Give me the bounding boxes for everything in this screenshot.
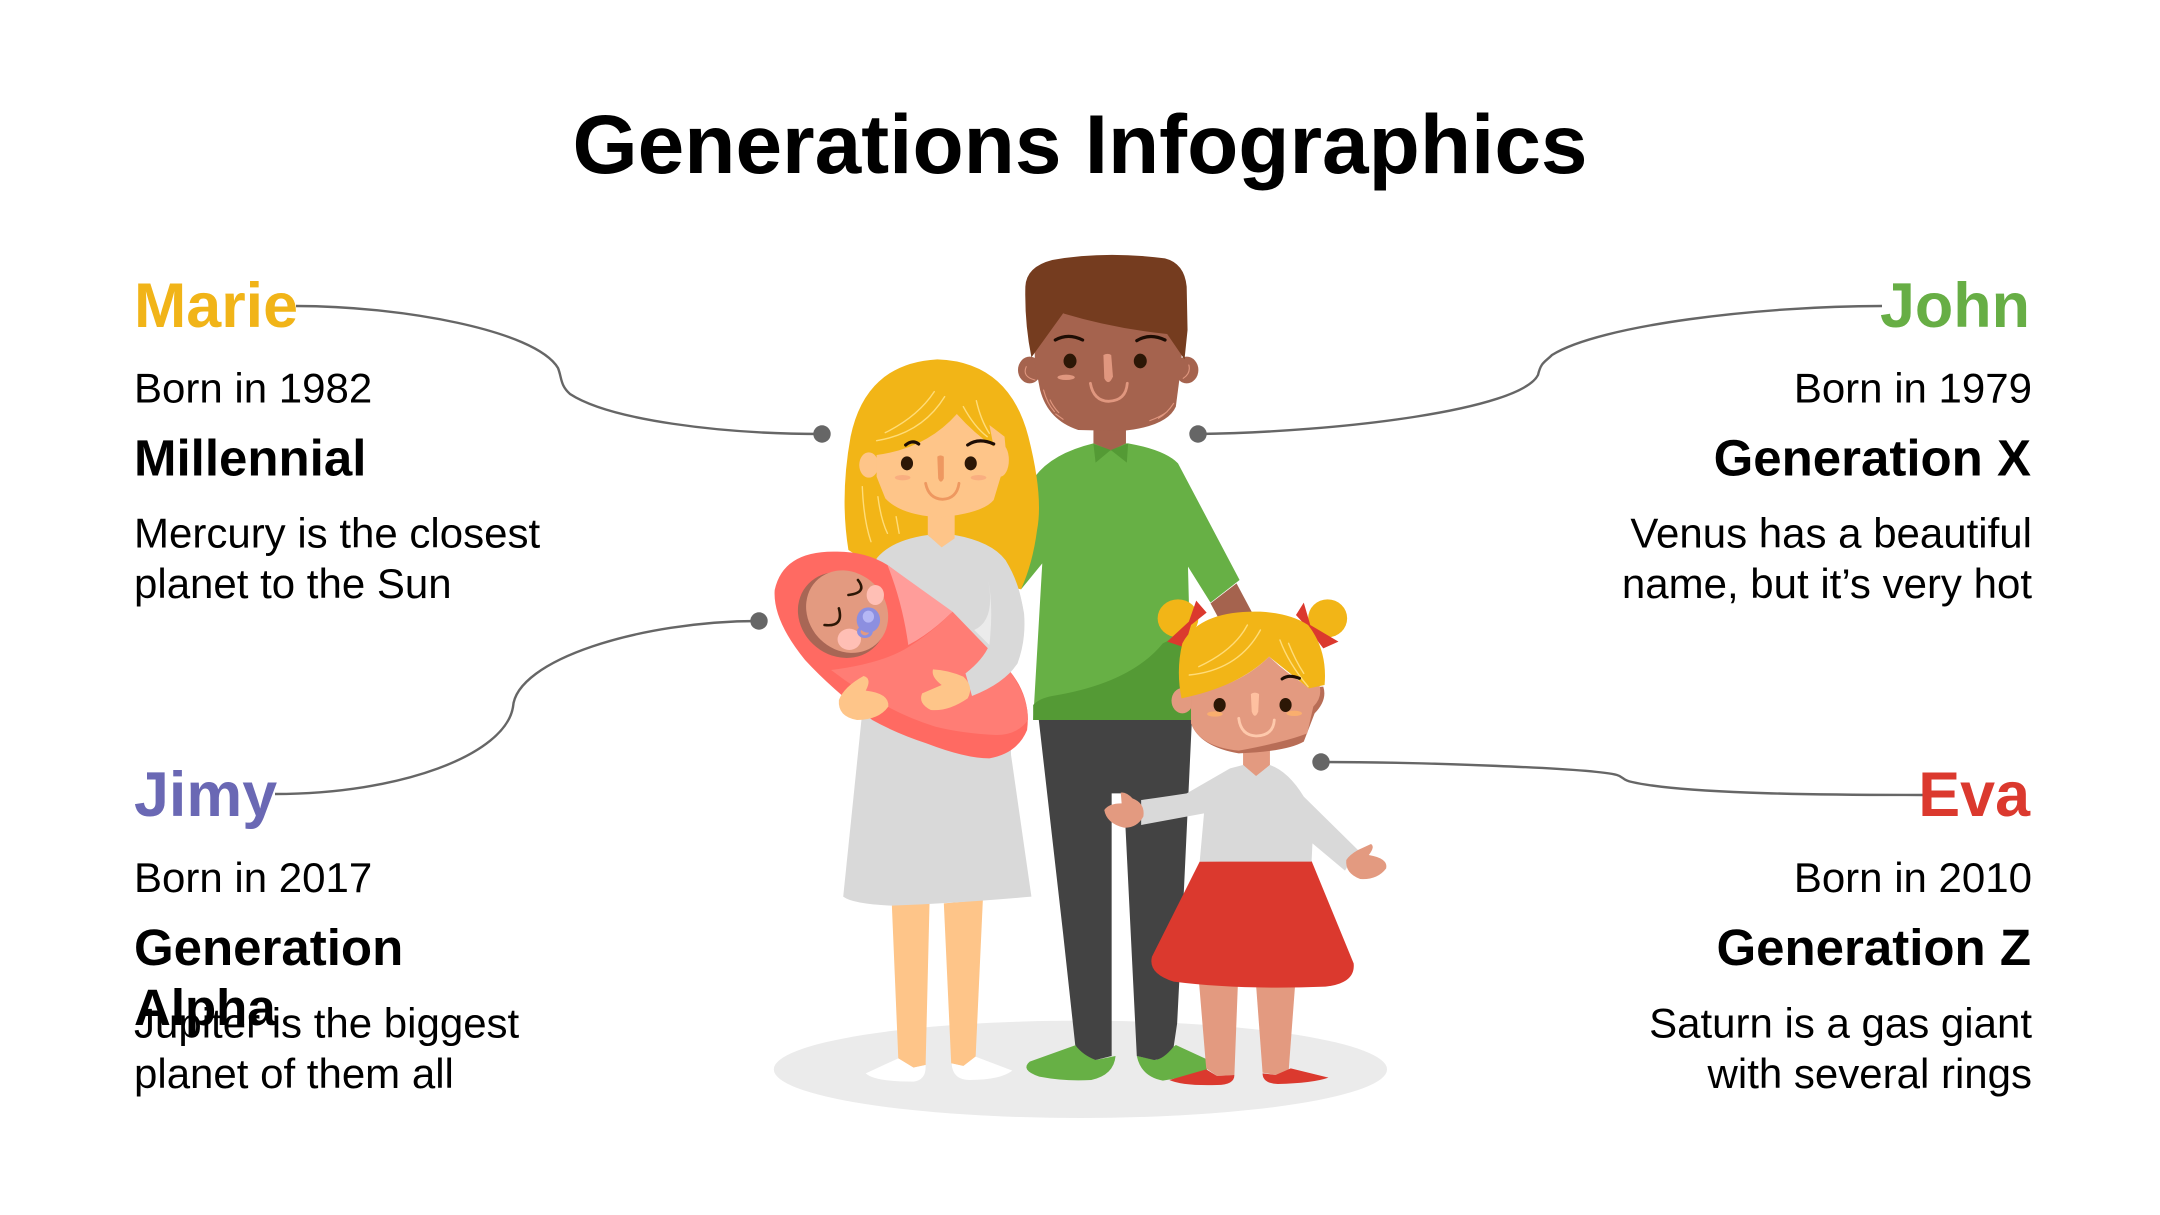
description: planet of them all: [134, 1050, 454, 1097]
panel: John: [1622, 271, 2032, 607]
woman hair back: [845, 359, 1039, 589]
sweater shade: [1033, 630, 1192, 720]
man cheek and stubble: [1025, 365, 1189, 421]
girl eyes: [1214, 698, 1292, 712]
girl buns: [1158, 599, 1347, 637]
woman figure: [843, 359, 1039, 1082]
woman legs: [892, 900, 983, 1068]
birth year: Born in 1979: [1794, 364, 2032, 412]
pacifier: [857, 607, 880, 637]
woman cheeks: [895, 475, 986, 480]
man trousers: [1039, 720, 1192, 1060]
baby: [775, 552, 1028, 758]
man figure: [1018, 255, 1256, 1081]
man nose: [1103, 354, 1113, 382]
description: Mercury is the closest: [134, 510, 540, 556]
girl smile: [1239, 718, 1274, 736]
birth year: Born in 1982: [134, 364, 372, 412]
name: John: John: [1880, 271, 2030, 341]
title: Generations Infographics: [572, 97, 1588, 191]
girl top: [1141, 765, 1358, 871]
baby face shade: [788, 566, 896, 664]
description: Venus has a beautiful: [1630, 510, 2032, 556]
man ears: [1018, 357, 1041, 383]
man shoes: [1026, 1045, 1208, 1081]
collar: [1093, 443, 1128, 463]
woman neck: [928, 507, 955, 547]
description: with several rings: [1707, 1050, 2032, 1097]
man eyes: [1064, 354, 1147, 368]
girl cheeks: [1207, 711, 1302, 717]
name: Marie: Marie: [134, 271, 298, 341]
man forearm: [1211, 583, 1256, 623]
description: Saturn is a gas giant: [1649, 1000, 2032, 1046]
woman dress: [843, 535, 1031, 906]
connector: Marie: [296, 306, 831, 443]
family illustration: [774, 255, 1387, 1118]
girl ear: [1172, 688, 1193, 713]
girl skirt: [1151, 861, 1354, 988]
blanket: [775, 552, 1028, 758]
woman ears: [859, 452, 878, 478]
girl nose: [1251, 693, 1259, 716]
man sweater: [1021, 443, 1240, 720]
ground shadow: [774, 1021, 1387, 1118]
panel: Jimy: [134, 760, 520, 1097]
name: Jimy: Jimy: [134, 760, 277, 830]
girl face shade: [1191, 687, 1324, 753]
connector: Jimy: [275, 612, 768, 794]
girl face: [1191, 657, 1320, 751]
woman brows: [906, 441, 994, 445]
panel: Marie: [134, 271, 540, 607]
woman face: [877, 414, 1007, 517]
woman hair strands: [862, 392, 989, 542]
description: name, but it’s very hot: [1622, 560, 2032, 607]
sleeve highlight: [974, 580, 991, 645]
girl hair strands: [1189, 625, 1308, 687]
generation: Generation Z: [1716, 919, 2031, 976]
connector: John: [1189, 306, 1882, 443]
man brows: [1055, 336, 1165, 341]
connector: Eva: [1312, 753, 1923, 795]
description: planet to the Sun: [134, 560, 452, 607]
name: Eva: Eva: [1918, 760, 2031, 830]
baby face: [796, 564, 898, 659]
blanket light: [831, 612, 1028, 735]
girl shoes: [1169, 1068, 1328, 1085]
woman eyes: [901, 456, 977, 470]
baby cheeks: [838, 585, 884, 650]
girl figure: [1104, 599, 1386, 1085]
birth year: Born in 2010: [1794, 854, 2032, 901]
woman shoes: [866, 1057, 1012, 1082]
woman arm: [966, 560, 1024, 696]
generation: Generation X: [1714, 430, 2031, 486]
girl bows: [1167, 601, 1338, 648]
generation: Alpha: [134, 979, 276, 1036]
blanket fold: [887, 565, 952, 645]
girl hands: [1104, 793, 1386, 879]
woman hands: [839, 669, 970, 720]
girl hair: [1179, 612, 1325, 698]
panel: Eva: [1649, 760, 2032, 1097]
birth year: Born in 2017: [134, 854, 372, 901]
man smile: [1090, 383, 1127, 401]
man neck: [1093, 425, 1126, 451]
man face: [1034, 313, 1182, 431]
baby closed eyes: [825, 580, 861, 625]
girl neck: [1243, 750, 1270, 777]
girl legs: [1199, 980, 1295, 1076]
man hair: [1025, 255, 1188, 359]
generation: Millennial: [134, 430, 366, 486]
woman smile: [926, 483, 959, 499]
description: Jupiter is the biggest: [134, 1000, 519, 1046]
generation: Generation: [134, 919, 403, 976]
woman nose: [937, 455, 944, 482]
girl brow: [1282, 676, 1299, 679]
